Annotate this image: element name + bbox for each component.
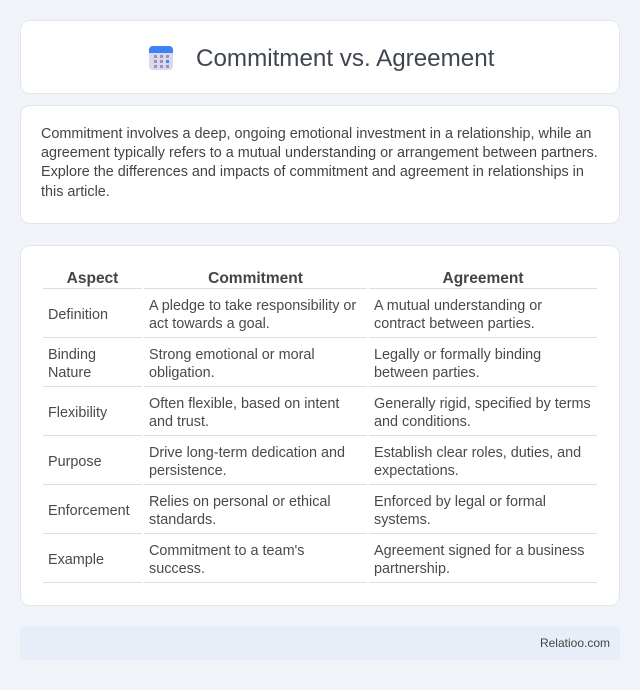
row: Example: Example [48,552,104,568]
row: Binding Nature: obligation. [149,365,215,381]
row: Definition: A mutual understanding or [374,298,542,314]
row: Purpose: persistence. [149,463,227,479]
panel: intro [20,105,620,224]
intro text: Commitment involves a deep, ongoing emotional investment in a relationship, while an [41,126,591,142]
row: Flexibility: Flexibility [48,405,107,421]
row: Binding Nature: Nature [48,365,91,381]
row: Example [43,543,597,583]
intro text [41,126,598,200]
table header: Agreement [443,270,523,287]
table header: Aspect [67,270,118,287]
table header: Commitment [208,270,303,287]
row: Flexibility: and conditions. [374,414,471,430]
intro text: agreement typically refers to a mutual understanding or arrangement between partners. [41,145,598,161]
row: Definition [43,298,597,338]
row: Definition: act towards a goal. [149,316,270,332]
intro text: this article. [41,184,110,200]
row: Binding Nature: Strong emotional or moral [149,347,315,363]
row: Binding Nature: Legally or formally binding [374,347,541,363]
row: Definition: contract between parties. [374,316,535,332]
row: Purpose: Establish clear roles, duties, and [374,445,581,461]
row: Example: Agreement signed for a business [374,543,584,559]
panel: header [20,20,620,94]
row: Definition: A pledge to take responsibility or [149,298,356,314]
intro text: Explore the differences and impacts of commitment and agreement in relationships in [41,164,584,180]
row: Purpose: Drive long-term dedication and [149,445,345,461]
footer credit: Relatioo.com [540,636,610,650]
panel: comparison table [20,245,620,606]
row: Flexibility: Often flexible, based on intent [149,396,339,412]
row: Example: Commitment to a team's [149,543,304,559]
row: Enforcement: systems. [374,512,431,528]
row: Flexibility [43,396,597,436]
row: Enforcement: Enforcement [48,503,130,519]
row: Example: success. [149,561,205,577]
icon: calendar [149,46,173,70]
row: Example: partnership. [374,561,450,577]
row: Binding Nature [43,347,597,387]
row: Flexibility: and trust. [149,414,209,430]
row: Binding Nature: Binding [48,347,96,363]
row: Purpose: Purpose [48,454,102,470]
row: Enforcement [43,494,597,534]
row: Purpose: expectations. [374,463,459,479]
row: Flexibility: Generally rigid, specified by terms [374,396,591,412]
table header [43,270,597,289]
row: Enforcement: Enforced by legal or formal [374,494,546,510]
footer [20,626,620,660]
row: Binding Nature: between parties. [374,365,480,381]
row: Definition: Definition [48,307,108,323]
row: Purpose [43,445,597,485]
title: Commitment vs. Agreement [196,45,494,72]
row: Enforcement: standards. [149,512,216,528]
row: Enforcement: Relies on personal or ethical [149,494,331,510]
